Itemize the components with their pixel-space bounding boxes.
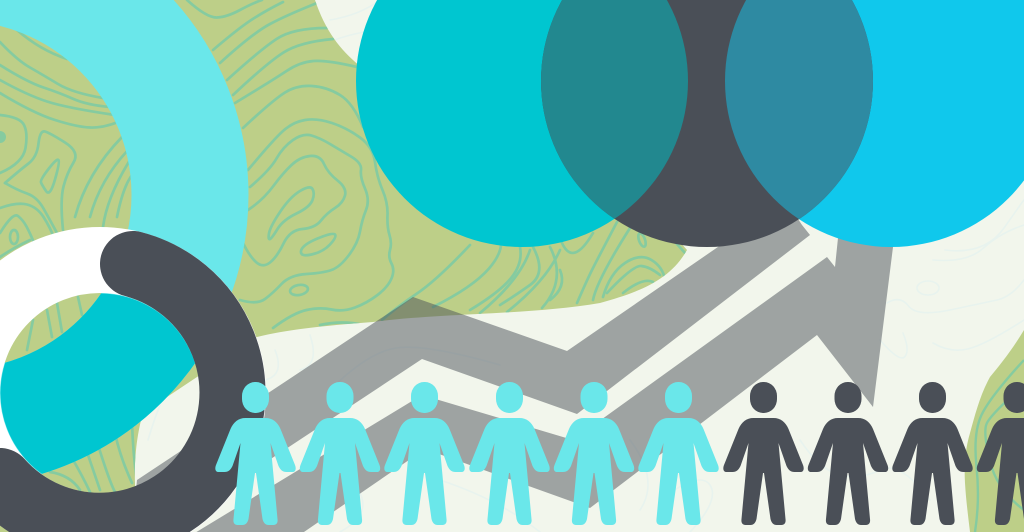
person 4 [469,382,550,525]
blue circle [725,0,1024,247]
blue and dark overlap [725,0,873,219]
person 6 [638,382,719,525]
person 9 [892,382,973,525]
rising arrow [130,200,893,532]
arrow upper band [130,218,810,532]
teal ring segment inside white ring [0,294,195,474]
teal and dark overlap [541,0,688,219]
person 1 [215,382,296,525]
person 2 [300,382,380,525]
green topographic blob [0,0,687,532]
person 8 [808,382,888,525]
person 5 [554,382,634,525]
row of people [215,382,1024,525]
dark ring arc [0,264,232,526]
dark circle [541,0,873,247]
teal circle [356,0,688,247]
white ring [0,260,233,526]
person 7 [723,382,804,525]
arrow lower band and head [180,200,893,532]
green blob bottom right [965,330,1024,532]
large light cyan ring [0,0,190,428]
venn circles [356,0,1024,247]
person 3 [384,382,465,525]
person 10 [977,382,1024,525]
